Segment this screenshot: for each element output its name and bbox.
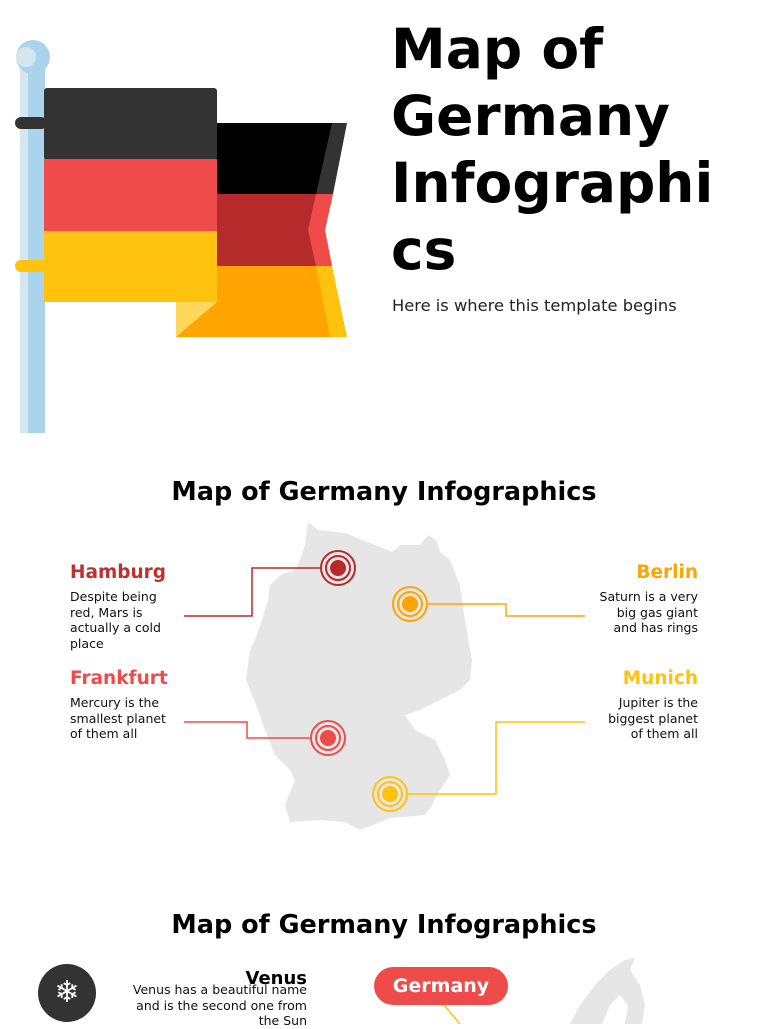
- marker: hamburg: [321, 551, 355, 585]
- title: Infographi: [391, 151, 713, 215]
- europe map + connector: [444, 958, 645, 1024]
- icon: dark circle: [38, 964, 96, 1022]
- connector lines: [184, 568, 585, 794]
- icon: flag: [15, 40, 347, 433]
- marker: berlin: [393, 587, 427, 621]
- title: cs: [391, 218, 456, 282]
- title: [391, 17, 713, 282]
- text: venus: Venus: [246, 968, 307, 989]
- marker: frankfurt: [311, 721, 345, 755]
- title: Map of: [391, 17, 603, 81]
- label: munich: Jupiter is the biggest planet of them all: [608, 695, 698, 741]
- title: Germany: [391, 84, 670, 148]
- label: frankfurt: Frankfurt: [70, 668, 168, 689]
- subtitle: Here is where this template begins: [392, 296, 677, 315]
- label: hamburg: [70, 562, 166, 650]
- label: frankfurt: [70, 668, 168, 741]
- heading: section 2: Map of Germany Infographics: [171, 477, 597, 507]
- text: venus: Venus has a beautiful name and is the second one from the Sun: [133, 982, 307, 1028]
- badge: germany: Germany: [393, 975, 489, 997]
- icon: dark circle: ❄: [54, 976, 80, 1009]
- marker: munich: [373, 777, 407, 811]
- heading: section 3: Map of Germany Infographics: [171, 910, 597, 940]
- label: berlin: [600, 562, 698, 635]
- label: munich: [608, 668, 698, 741]
- label: hamburg: Despite being red, Mars is actually a cold place: [70, 589, 161, 650]
- label: frankfurt: Mercury is the smallest planet of them all: [70, 695, 166, 741]
- label: berlin: Saturn is a very big gas giant and has rings: [600, 589, 698, 635]
- label: munich: Munich: [623, 668, 698, 689]
- label: hamburg: Hamburg: [70, 562, 166, 583]
- label: berlin: Berlin: [636, 562, 698, 583]
- badge: germany: [374, 967, 508, 1005]
